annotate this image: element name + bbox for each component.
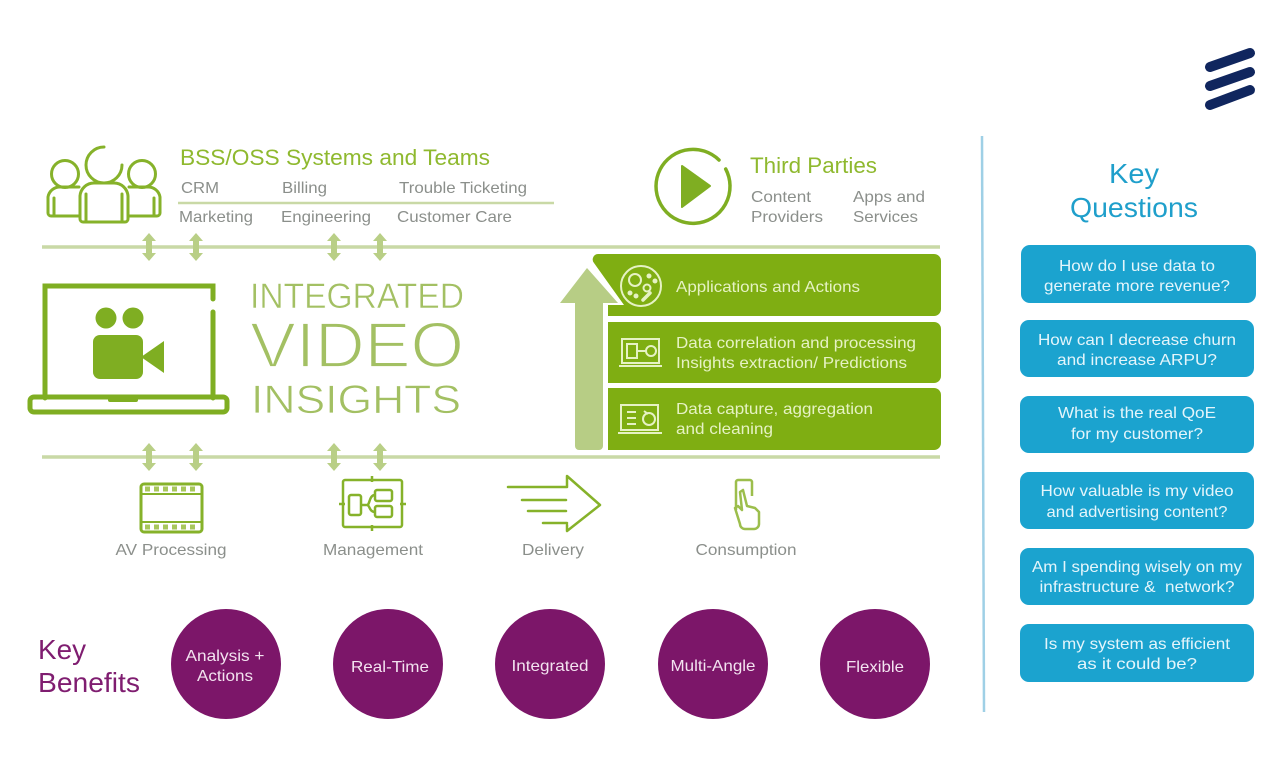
label: data capture: Data capture, aggregation bbox=[676, 401, 873, 418]
question 3: What is the real QoE bbox=[1058, 405, 1216, 422]
question 4 bbox=[1020, 472, 1254, 529]
question 1: How do I use data to bbox=[1059, 258, 1215, 275]
benefit: Flexible: Flexible bbox=[846, 659, 904, 676]
question 4: How valuable is my video bbox=[1040, 483, 1234, 500]
icon: laptop with video camera bbox=[30, 286, 227, 412]
question 6: Is my system as efficient bbox=[1044, 636, 1231, 653]
heading: Third Parties: Third Parties bbox=[750, 153, 877, 178]
text block: BSS/OSS systems: Trouble Ticketing bbox=[399, 180, 527, 197]
text block: BSS/OSS systems: CRM bbox=[181, 180, 219, 197]
label: data correlation: Data correlation and processing bbox=[676, 335, 916, 352]
icon: laptop with capture bbox=[618, 405, 662, 433]
question 2: and increase ARPU? bbox=[1057, 352, 1217, 369]
heading: Key Questions: Questions bbox=[1070, 192, 1198, 223]
icon: delivery arrow bbox=[508, 476, 600, 531]
icon: film strip bbox=[141, 484, 202, 532]
icon: laptop with data bbox=[619, 339, 662, 366]
heading: BSS/OSS Systems and Teams: BSS/OSS Systems and Teams bbox=[180, 145, 490, 170]
label: data capture bbox=[676, 401, 873, 438]
icon: touch phone bbox=[735, 480, 759, 529]
label: Management: Management bbox=[323, 542, 424, 559]
benefit: Multi-Angle: Multi-Angle bbox=[670, 658, 756, 675]
panel: data correlation and processing bbox=[608, 322, 941, 383]
text block: third parties list bbox=[751, 189, 925, 226]
text block: third parties list: Apps and bbox=[853, 189, 925, 206]
heading: Key Questions bbox=[1070, 158, 1198, 223]
arrows: bottom double-headed connectors bbox=[142, 443, 387, 471]
icon: applications gear bbox=[621, 266, 661, 306]
heading: Key Questions: Key bbox=[1109, 158, 1159, 189]
text block: BSS/OSS systems: Customer Care bbox=[397, 209, 512, 226]
panel: data capture bbox=[608, 388, 941, 450]
text block: third parties list: Providers bbox=[751, 209, 823, 226]
benefit: Multi-Angle bbox=[658, 609, 768, 719]
panel: applications and actions bbox=[593, 254, 941, 316]
label: Delivery: Delivery bbox=[522, 542, 584, 559]
question 1 bbox=[1021, 245, 1256, 303]
heading: Key Benefits: Benefits bbox=[38, 667, 140, 698]
label: applications and actions: Applications and Actions bbox=[676, 279, 860, 296]
title: Integrated Video Insights: INSIGHTS bbox=[251, 378, 461, 422]
benefit: Integrated bbox=[495, 609, 605, 719]
text block: BSS/OSS systems: Marketing bbox=[179, 209, 253, 226]
question 5: Am I spending wisely on my bbox=[1032, 559, 1242, 576]
arrows: top double-headed connectors bbox=[142, 233, 387, 261]
icon: people group bbox=[48, 147, 160, 222]
label: data correlation: Insights extraction/ Predictions bbox=[676, 355, 907, 372]
question 6: as it could be? bbox=[1077, 656, 1197, 673]
benefit: Analysis + Actions: Actions bbox=[197, 668, 253, 685]
label: Consumption: Consumption bbox=[696, 542, 796, 559]
text block: BSS/OSS systems bbox=[179, 180, 527, 226]
benefit: Analysis + Actions: Analysis + bbox=[186, 648, 264, 665]
text block: BSS/OSS systems: Engineering bbox=[281, 209, 371, 226]
heading: Key Benefits bbox=[38, 634, 140, 698]
question 2 bbox=[1020, 320, 1254, 377]
benefit: Analysis + Actions bbox=[171, 609, 281, 719]
icon: management diagram bbox=[339, 476, 406, 531]
benefit: Real-Time bbox=[333, 609, 443, 719]
question 6 bbox=[1020, 624, 1254, 682]
label: AV Processing: AV Processing bbox=[116, 542, 226, 559]
question 4: and advertising content? bbox=[1046, 504, 1228, 521]
icon: Ericsson logo bbox=[1210, 53, 1250, 105]
benefit: Flexible bbox=[820, 609, 930, 719]
label: data capture: and cleaning bbox=[676, 421, 773, 438]
arrow: large upward arrow bbox=[560, 268, 618, 450]
question 3 bbox=[1020, 396, 1254, 453]
benefit: Integrated: Integrated bbox=[512, 658, 588, 675]
title: Integrated Video Insights: INTEGRATED bbox=[250, 277, 464, 316]
question 1: generate more revenue? bbox=[1044, 278, 1230, 295]
label: data correlation bbox=[676, 335, 916, 372]
text block: BSS/OSS systems: Billing bbox=[282, 180, 327, 197]
question 5: infrastructure & network? bbox=[1040, 579, 1235, 596]
question 5 bbox=[1020, 548, 1254, 605]
text block: third parties list: Content bbox=[751, 189, 812, 206]
question 3: for my customer? bbox=[1071, 426, 1203, 443]
text block: third parties list: Services bbox=[853, 209, 918, 226]
question 2: How can I decrease churn bbox=[1038, 332, 1236, 349]
title: Integrated Video Insights: VIDEO bbox=[250, 309, 464, 381]
icon: play button bbox=[656, 149, 730, 223]
title: Integrated Video Insights bbox=[250, 277, 464, 422]
benefit: Real-Time: Real-Time bbox=[351, 659, 429, 676]
heading: Key Benefits: Key bbox=[38, 634, 86, 665]
